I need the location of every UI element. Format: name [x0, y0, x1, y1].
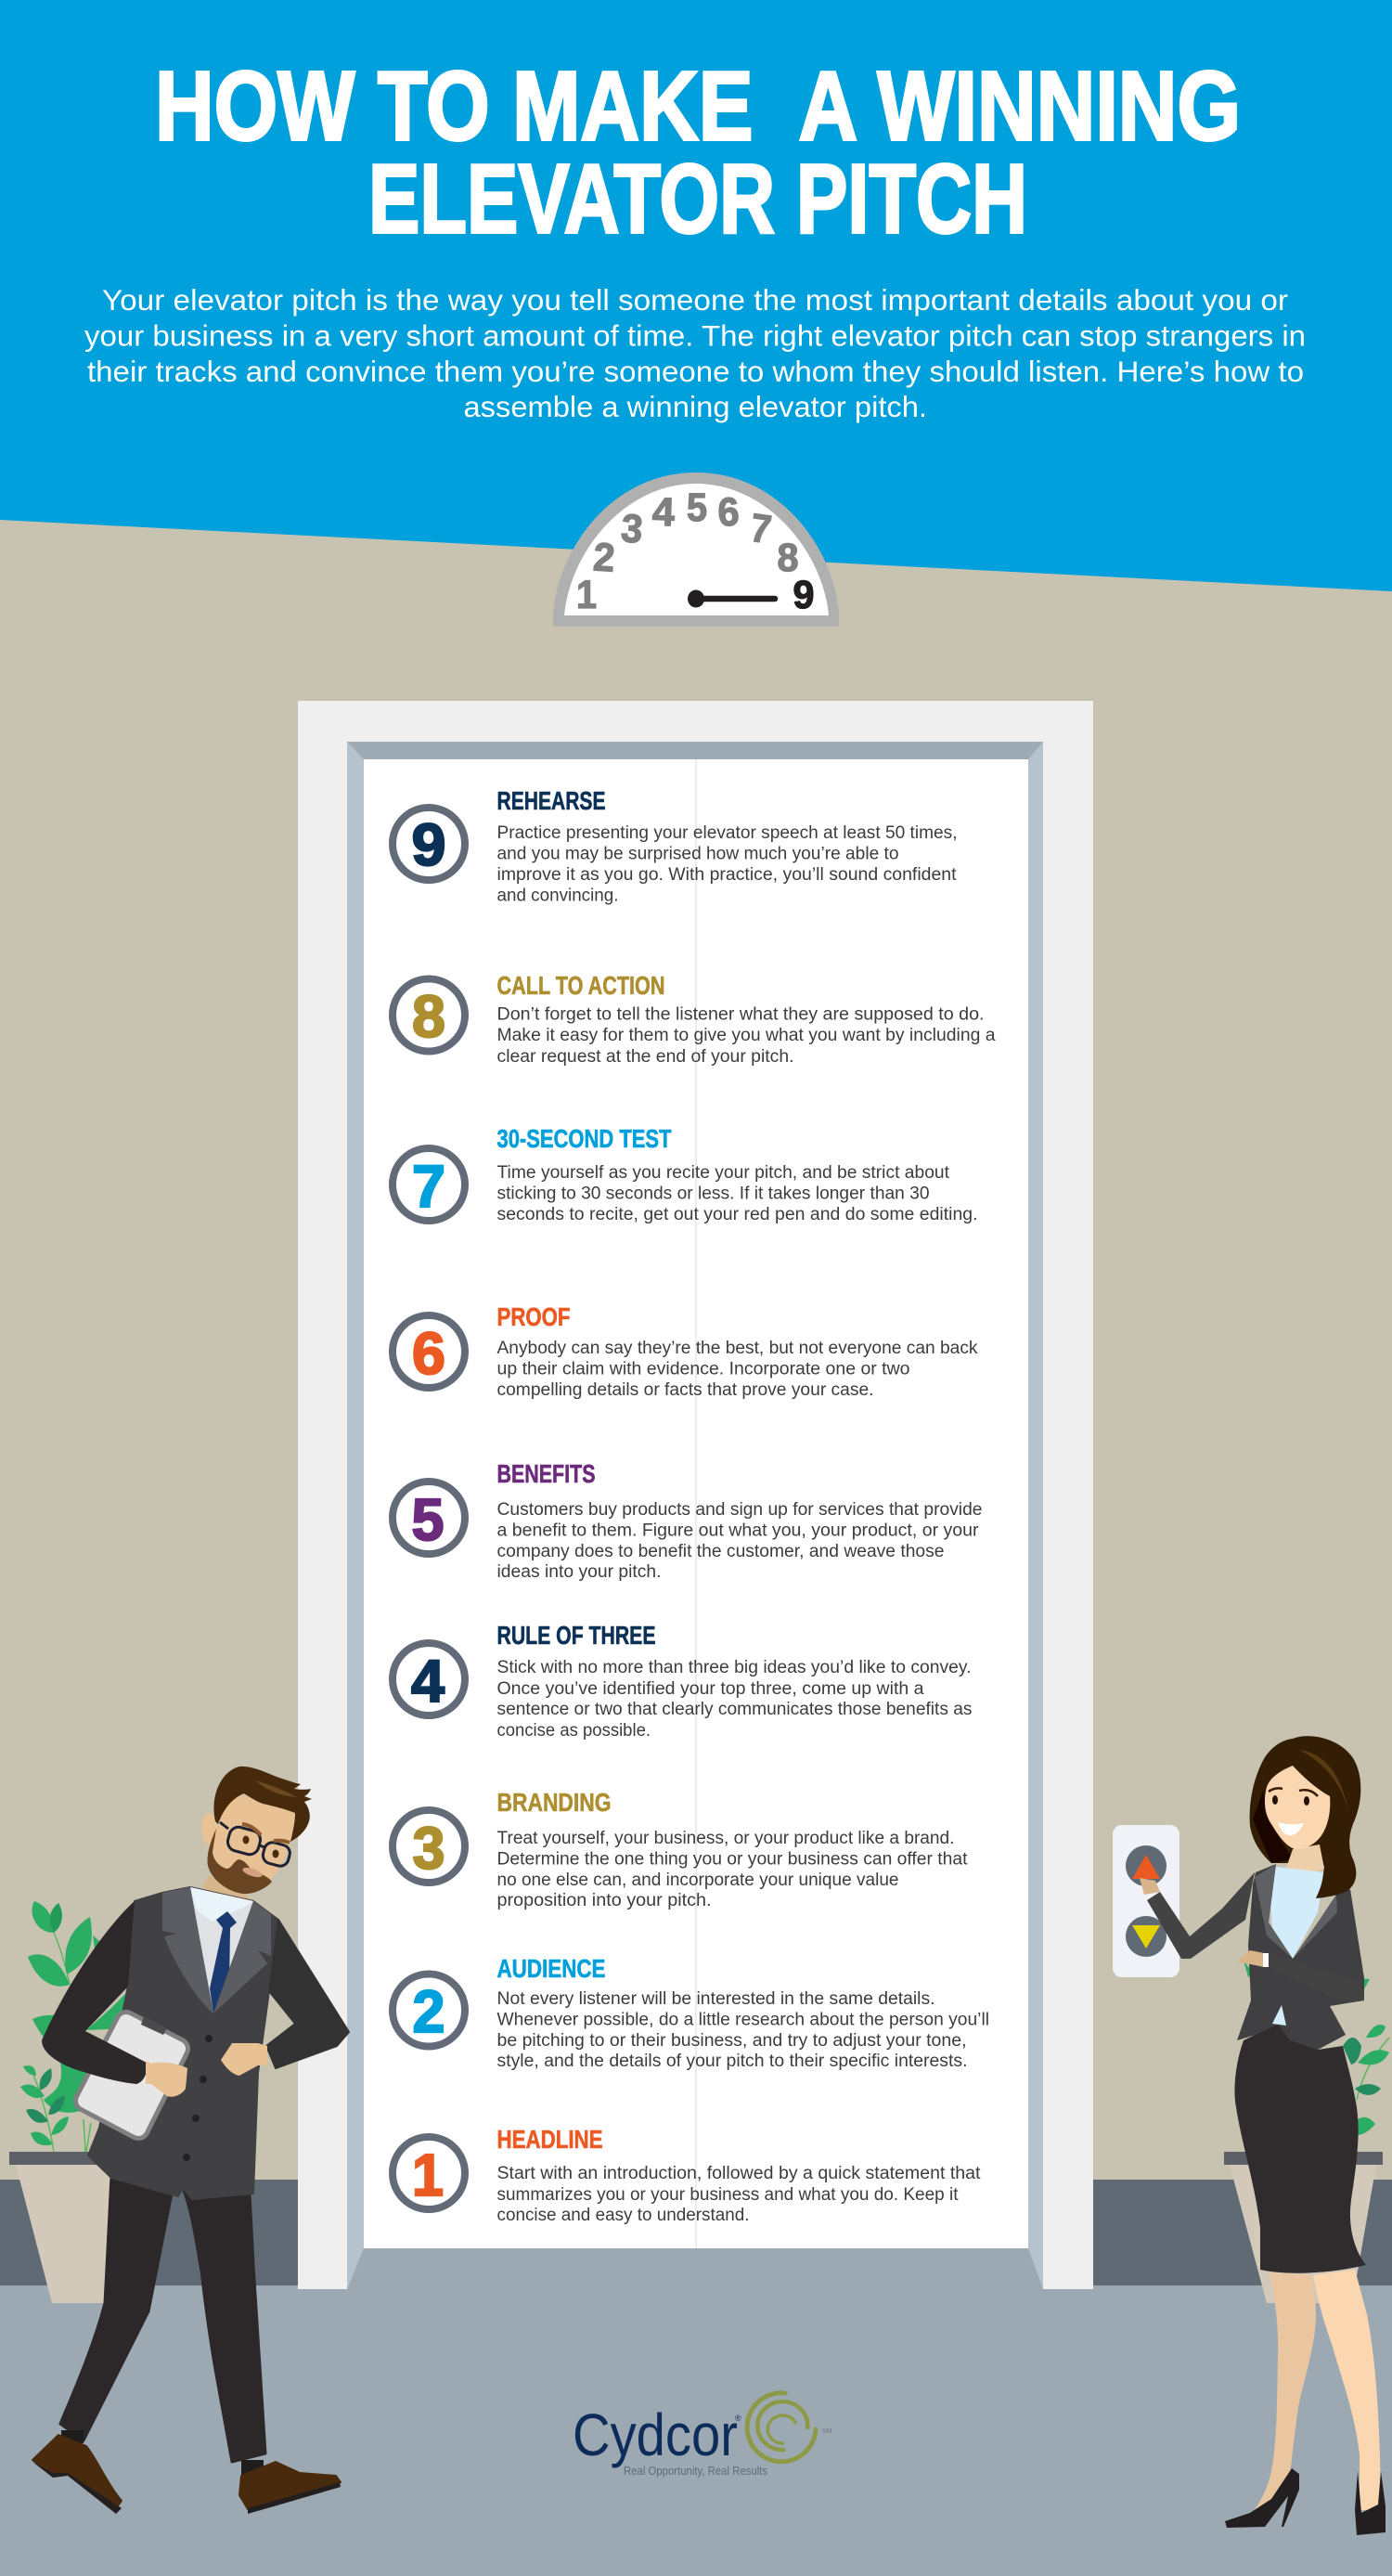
step 5: benefits: BENEFITS	[497, 1459, 596, 1488]
step 4: rule of three: RULE OF THREE	[497, 1621, 655, 1650]
woman: smile	[1278, 1822, 1304, 1835]
step 2: audience: style, and the details of your pitch to their specific interests.	[497, 2052, 967, 2071]
woman: left shoe	[1225, 2468, 1299, 2528]
man: ear	[201, 1813, 216, 1845]
man: beard	[207, 1829, 272, 1894]
step 4: rule of three	[393, 1621, 973, 1741]
intro text: assemble a winning elevator pitch.	[464, 390, 927, 423]
businessman illustration	[32, 1767, 349, 2514]
step 7: 30-second test: 7	[412, 1153, 445, 1220]
floor indicator dial: 1	[576, 573, 597, 617]
woman: lapels	[1255, 1864, 1337, 1959]
step 2: audience: Not every listener will be interested in the same details.	[497, 1989, 935, 2009]
floor indicator dial	[553, 472, 839, 627]
man: holding hand	[146, 2061, 187, 2097]
step 5: benefits: ideas into your pitch.	[497, 1562, 661, 1582]
plant left	[20, 1901, 130, 2152]
step 6: proof: Anybody can say they’re the best, but not everyone can back	[497, 1339, 978, 1358]
woman: blouse	[1270, 1867, 1324, 1959]
man: collar	[190, 1887, 253, 1922]
step 8: call to action: 8	[412, 983, 445, 1050]
step 2: audience: be pitching to or their business, and try to adjust your tone,	[497, 2031, 967, 2051]
step 1: headline: 1	[412, 2142, 444, 2208]
step 2: audience: 2	[412, 1978, 445, 2045]
woman: folded arm	[1269, 1953, 1364, 2003]
step 8: call to action: Don’t forget to tell the listener what they are supposed to do.	[497, 1004, 984, 1025]
step 8: call to action	[393, 971, 996, 1067]
woman: resting hand	[1237, 1950, 1264, 1967]
step 7: 30-second test: sticking to 30 seconds or less. If it takes longer than 30	[497, 1184, 930, 1203]
man: shoes	[32, 2430, 341, 2514]
woman: pointing hand	[1140, 1878, 1160, 1895]
step 1: headline: Start with an introduction, followed by a quick statement that	[497, 2164, 981, 2183]
man: shirt	[190, 1887, 253, 2013]
step 3: branding	[393, 1788, 968, 1910]
floor	[0, 2285, 1392, 2576]
step 6: proof: 6	[412, 1320, 445, 1387]
floor indicator dial: 4	[651, 490, 676, 535]
step 3: branding: no one else can, and incorporate your unique value	[497, 1871, 898, 1890]
step 3: branding: BRANDING	[497, 1788, 611, 1817]
floor indicator dial: 5	[687, 485, 707, 530]
step 1: headline: concise and easy to understand.	[497, 2206, 750, 2225]
Cydcor logo: SM	[822, 2428, 832, 2435]
floor indicator dial: 2	[592, 535, 616, 581]
step 9: rehearse: and convincing.	[497, 886, 618, 906]
step 4: rule of three: 4	[411, 1648, 445, 1715]
intro text	[84, 283, 1306, 423]
intro text: your business in a very short amount of time. The right elevator pitch can stop strangers in	[84, 319, 1306, 353]
step 4: rule of three: concise as possible.	[497, 1721, 651, 1741]
woman: jacket	[1237, 1864, 1364, 2050]
man: tie	[210, 1911, 237, 2013]
step 3: branding: proposition into your pitch.	[497, 1891, 711, 1910]
step 7: 30-second test: 30-SECOND TEST	[497, 1124, 672, 1153]
woman: eyebrows	[1269, 1788, 1318, 1796]
woman: neck	[1285, 1845, 1324, 1880]
woman: back leg	[1250, 2272, 1316, 2516]
step 9: rehearse: improve it as you go. With practice, you’ll sound confident	[497, 865, 957, 885]
Cydcor logo	[573, 2393, 832, 2478]
woman: watch	[1263, 1953, 1269, 1967]
baseboard	[0, 2180, 1392, 2286]
step 9: rehearse: REHEARSE	[497, 786, 605, 815]
man: hair	[213, 1767, 312, 1842]
man: mouth	[241, 1866, 264, 1879]
step 5: benefits: a benefit to them. Figure out what you, your product, or your	[497, 1521, 979, 1541]
step 6: proof: up their claim with evidence. Incorporate one or two	[497, 1359, 909, 1379]
man: buttons	[183, 2035, 213, 2161]
intro text: their tracks and convince them you’re someone to whom they should listen. Here’s how to	[87, 355, 1304, 388]
step 8: call to action: clear request at the end of your pitch.	[497, 1047, 794, 1067]
man: right sleeve	[266, 1920, 349, 2068]
floor indicator dial: 7	[748, 506, 774, 552]
man: eyebrows	[242, 1824, 290, 1843]
step 9: rehearse: and you may be surprised how much you’re able to	[497, 845, 898, 863]
step 7: 30-second test: Time yourself as you recite your pitch, and be strict about	[497, 1163, 950, 1183]
step 1: headline	[393, 2125, 981, 2225]
intro text: Your elevator pitch is the way you tell someone the most important details about you or	[102, 283, 1288, 317]
step 7: 30-second test: seconds to recite, get out your red pen and do some editing.	[497, 1205, 978, 1224]
step 2: audience: Whenever possible, do a little research about the person you’ll	[497, 2011, 989, 2029]
step 1: headline: HEADLINE	[497, 2125, 603, 2154]
floor indicator dial: 6	[716, 489, 741, 536]
step 5: benefits: Customers buy products and sign up for services that provide	[497, 1500, 982, 1520]
woman: hair highlight	[1299, 1750, 1348, 1810]
man: neck	[202, 1875, 251, 1906]
businesswoman illustration	[1140, 1736, 1386, 2535]
step 6: proof	[393, 1302, 978, 1400]
step 9: rehearse	[393, 786, 958, 906]
plant pot left	[9, 2152, 111, 2303]
plant right	[1244, 1959, 1389, 2135]
floor indicator dial: 9	[793, 573, 815, 617]
step 3: branding: Determine the one thing you or your business can offer that	[497, 1849, 968, 1870]
call button panel	[1113, 1825, 1179, 1977]
Cydcor logo: ®	[735, 2414, 741, 2423]
woman: face	[1265, 1766, 1330, 1849]
woman: skirt	[1234, 2024, 1366, 2273]
man: trousers	[60, 2178, 265, 2462]
woman: blouse lower	[1272, 2005, 1286, 2026]
plant pot right	[1224, 2152, 1383, 2303]
step 4: rule of three: sentence or two that clearly communicates those benefits as	[497, 1700, 973, 1719]
man: face	[210, 1794, 297, 1887]
woman: hair lock	[1316, 1819, 1356, 1898]
woman: pointing arm	[1147, 1872, 1255, 1959]
step 4: rule of three: Stick with no more than three big ideas you’d like to convey.	[497, 1658, 971, 1677]
man: watch hand	[221, 2043, 267, 2076]
title: ELEVATOR PITCH	[368, 145, 1027, 254]
blue header band	[0, 0, 1392, 591]
woman: hair back	[1250, 1736, 1360, 1898]
step 5: benefits	[393, 1459, 982, 1582]
man: clipboard	[85, 2016, 178, 2129]
Cydcor logo: Cydcor	[573, 2401, 738, 2468]
man: glasses	[220, 1822, 291, 1868]
floor indicator dial: 3	[619, 506, 644, 552]
man: eyes	[243, 1836, 278, 1858]
step 2: audience	[393, 1954, 989, 2071]
man: left sleeve	[42, 1901, 147, 2084]
Cydcor logo: Real Opportunity, Real Results	[624, 2464, 767, 2478]
step 8: call to action: Make it easy for them to give you what you want by including a	[497, 1026, 996, 1045]
step 5: benefits: company does to benefit the customer, and weave those	[497, 1542, 945, 1561]
woman: eyes	[1272, 1795, 1309, 1806]
title	[155, 52, 1241, 254]
step 6: proof: PROOF	[497, 1302, 570, 1331]
woman: right shoe	[1355, 2471, 1386, 2535]
step 2: audience: AUDIENCE	[497, 1954, 605, 1983]
woman: hair shadow	[1253, 1789, 1293, 1863]
step 3: branding: Treat yourself, your business, or your product like a brand.	[497, 1829, 954, 1848]
step 8: call to action: CALL TO ACTION	[497, 971, 664, 1000]
woman: front leg	[1313, 2270, 1381, 2510]
step 4: rule of three: Once you’ve identified your top three, come up with a	[497, 1679, 924, 1699]
step 9: rehearse: 9	[412, 811, 445, 878]
step 5: benefits: 5	[412, 1486, 444, 1553]
step 6: proof: compelling details or facts that prove your case.	[497, 1380, 874, 1400]
elevator interior	[347, 742, 1043, 2289]
floor indicator dial: 8	[778, 536, 798, 580]
step 7: 30-second test	[393, 1124, 978, 1224]
step 9: rehearse: Practice presenting your elevator speech at least 50 times,	[497, 823, 958, 843]
man: lapels	[162, 1887, 271, 2013]
man: jacket	[88, 1887, 278, 2199]
elevator door frame	[298, 701, 1093, 2289]
step 1: headline: summarizes you or your business and what you do. Keep it	[497, 2185, 959, 2205]
man: hair highlight	[255, 1780, 297, 1797]
step 3: branding: 3	[412, 1815, 445, 1882]
